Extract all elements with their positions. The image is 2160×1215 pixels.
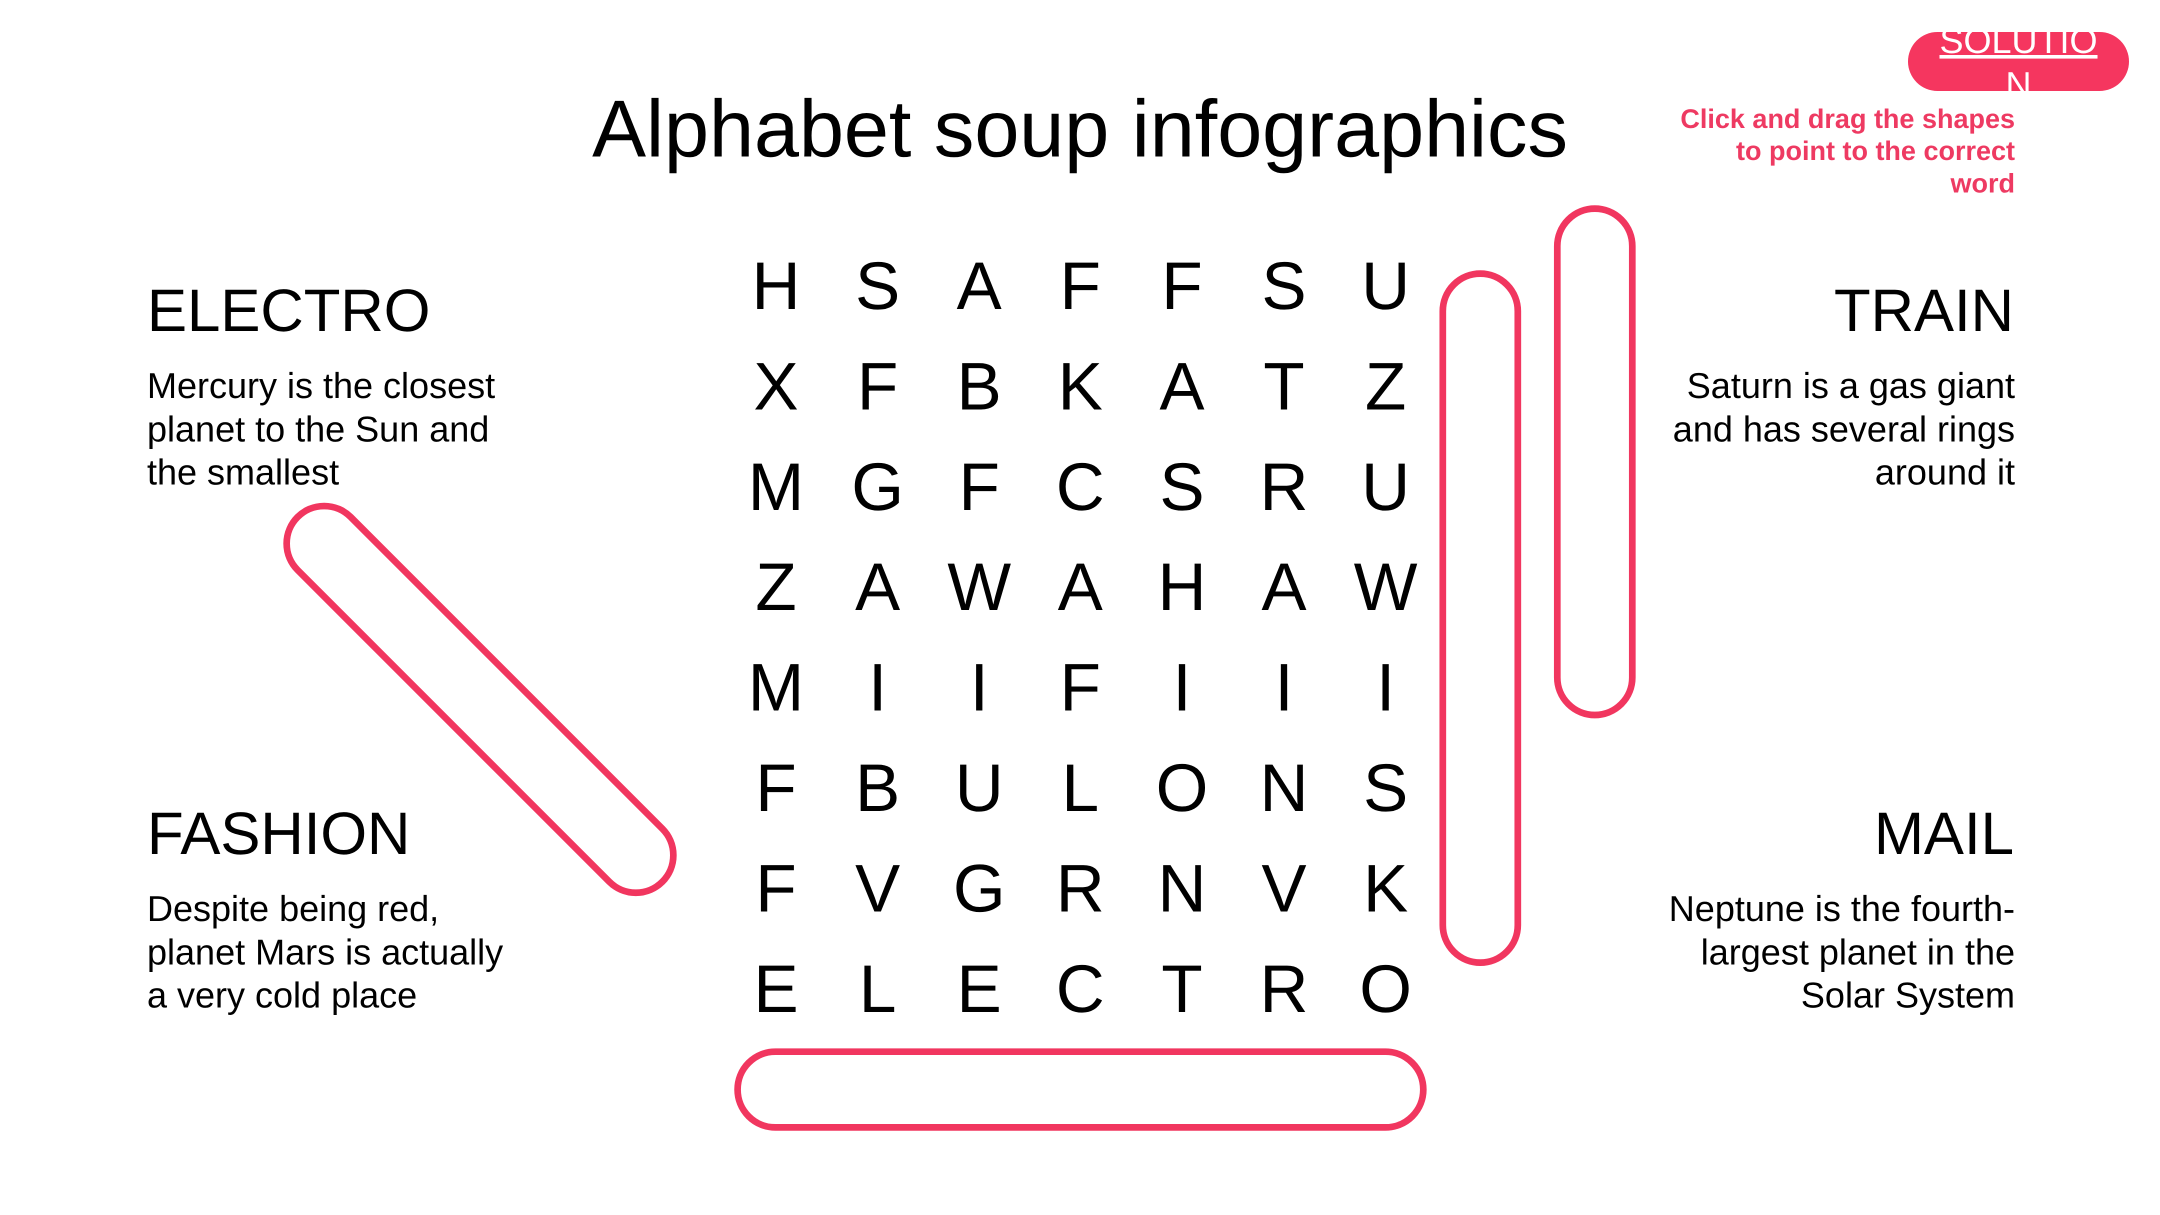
instructions text: Click and drag the shapes bbox=[1680, 104, 2015, 134]
text block: fashion: planet Mars is actually bbox=[147, 932, 503, 972]
button: solution: SOLUTIO bbox=[1939, 20, 2098, 61]
letter grid: Z bbox=[755, 550, 797, 625]
letter grid: V bbox=[855, 851, 900, 926]
letter grid: N bbox=[1260, 751, 1308, 826]
letter grid: M bbox=[748, 450, 804, 525]
text block: electro: planet to the Sun and bbox=[147, 409, 489, 450]
letter grid: S bbox=[1159, 450, 1205, 525]
letter grid: M bbox=[748, 651, 804, 726]
letter grid: E bbox=[753, 952, 799, 1027]
text block: electro: the smallest bbox=[147, 452, 339, 493]
text block: train: around it bbox=[1875, 452, 2015, 493]
letter grid: I bbox=[1376, 651, 1395, 726]
letter grid: O bbox=[1359, 952, 1412, 1027]
letter grid: K bbox=[1058, 349, 1103, 424]
instructions text bbox=[1680, 104, 2015, 198]
letter grid: Z bbox=[1365, 349, 1406, 424]
text block: train bbox=[1673, 277, 2015, 493]
instructions text: to point to the correct bbox=[1736, 136, 2015, 166]
title: Alphabet soup infographics bbox=[592, 84, 1568, 174]
letter grid: A bbox=[1159, 349, 1205, 424]
letter grid: U bbox=[955, 751, 1004, 826]
letter grid: U bbox=[1361, 249, 1410, 324]
letter grid: S bbox=[1261, 249, 1307, 324]
letter grid: C bbox=[1056, 952, 1105, 1027]
text block: train: TRAIN bbox=[1834, 277, 2014, 344]
letter grid: F bbox=[755, 851, 797, 926]
letter grid: L bbox=[1062, 751, 1099, 826]
letter grid: H bbox=[1158, 550, 1206, 625]
letter grid: F bbox=[1060, 249, 1101, 324]
letter grid: B bbox=[855, 751, 900, 826]
text block: electro: Mercury is the closest bbox=[147, 365, 495, 406]
text block: fashion: Despite being red, bbox=[147, 888, 439, 929]
text block: mail: largest planet in the bbox=[1701, 932, 2015, 972]
text block: mail bbox=[1669, 800, 2015, 1016]
letter grid: I bbox=[868, 651, 887, 726]
text block: train: and has several rings bbox=[1673, 409, 2015, 450]
text block: electro: ELECTRO bbox=[147, 277, 430, 344]
letter grid: T bbox=[1161, 952, 1203, 1027]
letter grid: O bbox=[1156, 751, 1208, 826]
letter grid: S bbox=[1363, 751, 1408, 826]
letter grid: F bbox=[1161, 249, 1203, 324]
letter grid: A bbox=[1058, 550, 1103, 625]
letter grid: R bbox=[1260, 450, 1308, 525]
text block: electro bbox=[147, 277, 495, 493]
instructions text: word bbox=[1950, 168, 2015, 198]
letter grid: R bbox=[1056, 851, 1105, 926]
letter grid: R bbox=[1260, 952, 1308, 1027]
text block: fashion: FASHION bbox=[147, 800, 410, 867]
letter grid: B bbox=[957, 349, 1002, 424]
capsule: diagonal bbox=[271, 491, 689, 908]
button: solution: N bbox=[2006, 64, 2032, 105]
capsule: horizontal bbox=[738, 1052, 1423, 1127]
text block: mail: Neptune is the fourth- bbox=[1669, 888, 2015, 929]
text block: mail: Solar System bbox=[1801, 975, 2015, 1016]
letter grid: N bbox=[1158, 851, 1206, 926]
letter grid: I bbox=[1275, 651, 1293, 726]
letter grid: K bbox=[1363, 851, 1408, 926]
letter grid: F bbox=[755, 751, 797, 826]
capsule: right vertical bbox=[1557, 209, 1632, 715]
letter grid: G bbox=[851, 450, 904, 525]
button: solution bbox=[1908, 32, 2129, 91]
letter grid: W bbox=[1354, 550, 1418, 625]
letter grid: E bbox=[957, 952, 1002, 1027]
letter grid: W bbox=[947, 550, 1011, 625]
text block: fashion: a very cold place bbox=[147, 975, 417, 1016]
letter grid: I bbox=[1173, 651, 1191, 726]
letter grid: F bbox=[1060, 651, 1101, 726]
capsule: tall vertical bbox=[1443, 274, 1518, 963]
letter grid: F bbox=[857, 349, 898, 424]
letter grid: X bbox=[753, 349, 799, 424]
letter grid: L bbox=[859, 952, 896, 1027]
text block: mail: MAIL bbox=[1874, 800, 2014, 867]
letter grid: A bbox=[1261, 550, 1307, 625]
letter grid: T bbox=[1263, 349, 1305, 424]
letter grid bbox=[748, 249, 1418, 1027]
letter grid: I bbox=[970, 651, 989, 726]
text block: train: Saturn is a gas giant bbox=[1687, 365, 2015, 406]
letter grid: H bbox=[752, 249, 800, 324]
letter grid: C bbox=[1056, 450, 1105, 525]
letter grid: U bbox=[1361, 450, 1410, 525]
text block: fashion bbox=[147, 800, 503, 1016]
letter grid: G bbox=[953, 851, 1005, 926]
letter grid: V bbox=[1261, 851, 1307, 926]
letter grid: A bbox=[957, 249, 1002, 324]
letter grid: F bbox=[959, 450, 1000, 525]
letter grid: A bbox=[855, 550, 900, 625]
letter grid: S bbox=[855, 249, 900, 324]
